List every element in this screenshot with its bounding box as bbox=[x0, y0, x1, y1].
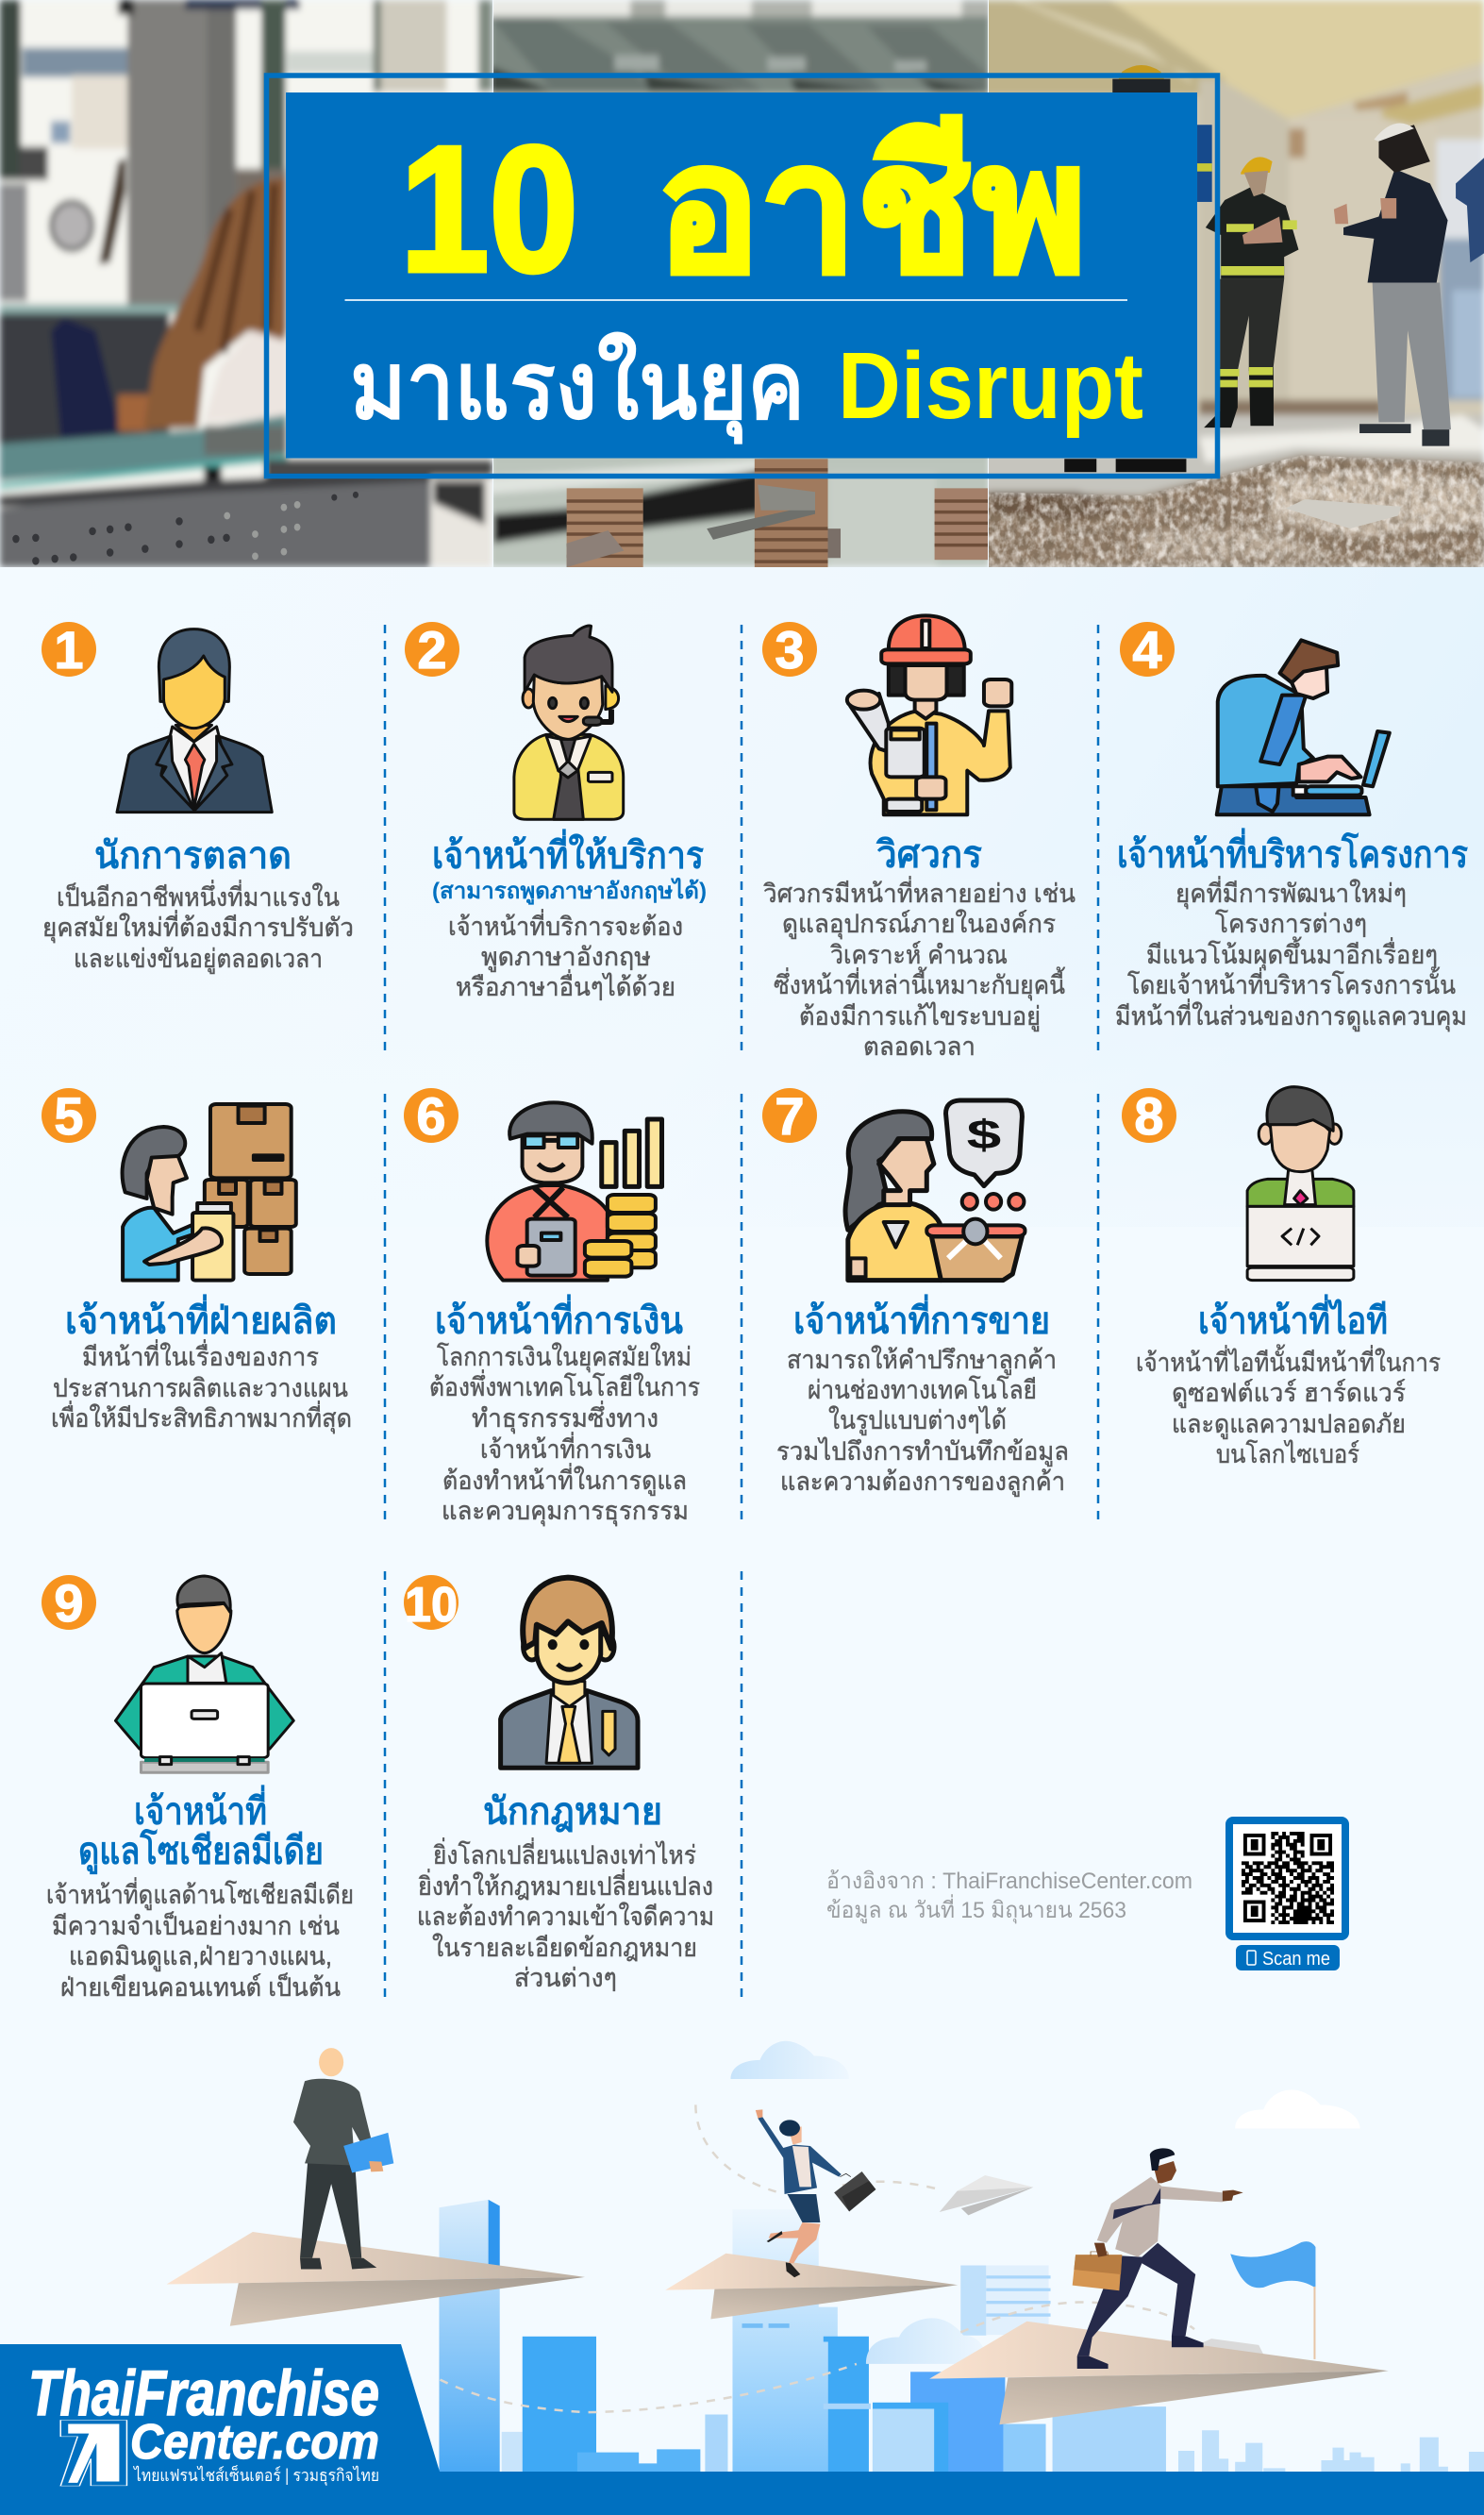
description: ยุคสมัยใหม่ที่ต้องมีการปรับตัว bbox=[42, 910, 354, 944]
description: เพื่อให้มีประสิทธิภาพมากที่สุด bbox=[51, 1400, 352, 1434]
header photo: industrial machinery bbox=[493, 0, 988, 567]
QR code bbox=[1229, 1820, 1345, 1937]
description: และดูแลความปลอดภัย bbox=[1172, 1410, 1406, 1439]
header photo: damaged building inspection bbox=[989, 0, 1484, 567]
description: ดูซอฟต์แวร์ ฮาร์ดแวร์ bbox=[1172, 1378, 1406, 1408]
description: ทำธุรกรรมซึ่งทาง bbox=[472, 1400, 659, 1434]
heading: นักกฎหมาย bbox=[483, 1791, 662, 1833]
description: ตลอดเวลา bbox=[863, 1032, 975, 1061]
footer illustration: dashed flight paths bbox=[440, 2104, 1194, 2412]
title background bbox=[286, 92, 1197, 459]
description: วิศวกรมีหน้าที่หลายอย่าง เช่น bbox=[763, 876, 1075, 908]
icon: sales officer: $ bbox=[967, 1112, 1001, 1158]
number badge 3: 3 bbox=[775, 620, 805, 679]
description: และต้องทำความเข้าใจดีความ bbox=[417, 1902, 714, 1931]
number badge 8: 8 bbox=[1134, 1086, 1164, 1146]
figure: businessman walking bbox=[1073, 2148, 1243, 2369]
description: และควบคุมการธุรกรรม bbox=[442, 1497, 689, 1527]
icon: service officer bbox=[514, 626, 624, 819]
number badge 1: 1 bbox=[54, 620, 84, 679]
description: โครงการต่างๆ bbox=[1215, 910, 1367, 938]
description bbox=[46, 1877, 354, 2002]
heading bbox=[78, 1785, 324, 1874]
description bbox=[51, 1339, 352, 1434]
panel: 2 service officer bbox=[405, 620, 707, 1001]
number badge 4: 4 bbox=[1132, 620, 1162, 679]
icon: sales officer bbox=[845, 1100, 1025, 1281]
logo: ThaiFranchise Center.com: Center.com bbox=[130, 2415, 379, 2470]
panel: 4 project manager bbox=[1115, 620, 1468, 1032]
figure: businesswoman jumping bbox=[756, 2109, 875, 2277]
number badge 4 bbox=[1120, 620, 1175, 679]
description bbox=[42, 880, 354, 974]
logo: ThaiFranchise Center.com bbox=[0, 2344, 440, 2515]
icon: production officer bbox=[123, 1104, 296, 1281]
source credit bbox=[826, 1869, 1192, 1924]
subtitle: มาแรงในยุค bbox=[350, 331, 805, 444]
number badge 6: 6 bbox=[416, 1086, 446, 1146]
panel: 6 finance officer bbox=[404, 1086, 700, 1527]
icon: social media officer bbox=[115, 1576, 293, 1772]
number badge 7 bbox=[762, 1086, 817, 1146]
description: ต้องทำหน้าที่ในการดูแล bbox=[442, 1463, 687, 1496]
number badge 5 bbox=[42, 1086, 96, 1146]
description: โดยเจ้าหน้าที่บริหารโครงการนั้น bbox=[1127, 966, 1456, 999]
description: และแข่งขันอยู่ตลอดเวลา bbox=[74, 945, 323, 974]
subtitle bbox=[350, 331, 1143, 444]
description: เจ้าหน้าที่ดูแลด้านโซเชียลมีเดีย bbox=[46, 1877, 354, 1910]
number badge 9 bbox=[42, 1573, 96, 1633]
description: ยิ่งโลกเปลี่ยนแปลงเท่าไหร่ bbox=[433, 1837, 696, 1869]
number badge 3 bbox=[762, 620, 817, 679]
logo: ThaiFranchise Center.com: ไทยแฟรนไชส์เซ็นเตอร์ | รวมธุรกิจไทย bbox=[132, 2464, 379, 2486]
heading: เจ้าหน้าที่ไอที bbox=[1198, 1294, 1388, 1342]
heading: เจ้าหน้าที่การเงิน bbox=[435, 1294, 683, 1342]
description: ส่วนต่างๆ bbox=[514, 1964, 617, 1992]
number badge 2: 2 bbox=[417, 620, 447, 679]
description: และความต้องการของลูกค้า bbox=[780, 1467, 1065, 1497]
number badge 8 bbox=[1122, 1086, 1176, 1146]
icon: flag bbox=[1230, 2241, 1315, 2359]
description: เจ้าหน้าที่การเงิน bbox=[480, 1432, 651, 1464]
description: หรือภาษาอื่นๆได้ด้วย bbox=[456, 969, 675, 1001]
panel: 10 lawyer bbox=[404, 1575, 714, 1992]
description: มีแนวโน้มผุดขึ้นมาอีกเรื่อยๆ bbox=[1146, 936, 1438, 971]
description bbox=[1115, 876, 1467, 1032]
description: เป็นอีกอาชีพหนึ่งที่มาแรงใน bbox=[57, 880, 340, 912]
description: ในรูปแบบต่างๆได้ bbox=[828, 1405, 1007, 1435]
source credit: อ้างอิงจาก : ThaiFranchiseCenter.com bbox=[826, 1869, 1192, 1894]
description: รวมไปถึงการทำบันทึกข้อมูล bbox=[776, 1437, 1069, 1467]
description: วิเคราะห์ คำนวณ bbox=[830, 940, 1008, 969]
heading: ดูแลโซเชียลมีเดีย bbox=[78, 1829, 324, 1874]
small paper plane bbox=[940, 2175, 1033, 2215]
heading: วิศวกร bbox=[875, 834, 982, 876]
footer illustration: skyline bbox=[439, 2200, 1484, 2473]
scan me button bbox=[1236, 1945, 1340, 1970]
subtitle: Disrupt bbox=[838, 333, 1143, 439]
number badge 2 bbox=[405, 620, 459, 679]
description: เจ้าหน้าที่บริการจะต้อง bbox=[448, 909, 683, 941]
description: ฝ่ายเขียนคอนเทนต์ เป็นต้น bbox=[60, 1970, 341, 2002]
description: แอดมินดูแล,ฝ่ายวางแผน, bbox=[69, 1942, 332, 1971]
icon: logo arrow bbox=[60, 2421, 126, 2486]
description: ยุคที่มีการพัฒนาใหม่ๆ bbox=[1176, 876, 1407, 910]
description bbox=[448, 909, 683, 1001]
description: สามารถให้คำปรึกษาลูกค้า bbox=[787, 1345, 1057, 1375]
panel: 7 sales officer bbox=[762, 1086, 1069, 1497]
description: ประสานการผลิตและวางแผน bbox=[53, 1374, 348, 1402]
paper plane 3 bbox=[929, 2322, 1389, 2424]
panel: 1 marketer bbox=[42, 620, 354, 974]
main title: 10 bbox=[400, 109, 578, 310]
sub heading: (สามารถพูดภาษาอังกฤษได้) bbox=[432, 877, 707, 905]
panel: 5 production officer bbox=[42, 1086, 352, 1434]
paper plane 2 bbox=[665, 2254, 958, 2319]
description bbox=[429, 1342, 700, 1527]
description: บนโลกไซเบอร์ bbox=[1216, 1439, 1359, 1468]
scan me button: Scan me bbox=[1262, 1949, 1330, 1970]
heading: เจ้าหน้าที่ให้บริการ bbox=[432, 829, 704, 877]
icon: lawyer bbox=[501, 1578, 638, 1768]
source credit: ข้อมูล ณ วันที่ 15 มิถุนายน 2563 bbox=[826, 1894, 1126, 1924]
icon: engineer bbox=[847, 615, 1011, 814]
description: ผ่านช่องทางเทคโนโลยี bbox=[808, 1376, 1037, 1404]
description: มีความจำเป็นอย่างมาก เช่น bbox=[52, 1909, 340, 1940]
number badge 6 bbox=[404, 1086, 459, 1146]
number badge 1 bbox=[42, 620, 96, 679]
heading: เจ้าหน้าที่การขาย bbox=[793, 1294, 1050, 1342]
description: มีหน้าที่ในเรื่องของการ bbox=[82, 1339, 319, 1371]
title frame bbox=[266, 75, 1217, 476]
icon: project manager bbox=[1217, 640, 1390, 814]
description: ซึ่งหน้าที่เหล่านี้เหมาะกับยุคนี้ bbox=[774, 966, 1065, 1001]
description: ในรายละเอียดข้อกฎหมาย bbox=[432, 1933, 697, 1962]
paper plane 1 bbox=[167, 2232, 585, 2326]
description: ยิ่งทำให้กฎหมายเปลี่ยนแปลง bbox=[418, 1869, 713, 1901]
description: มีหน้าที่ในส่วนของการดูแลควบคุม bbox=[1115, 998, 1467, 1032]
icon: finance officer bbox=[487, 1102, 662, 1281]
number badge 5: 5 bbox=[54, 1086, 84, 1146]
description: ดูแลอุปกรณ์ภายในองค์กร bbox=[782, 909, 1056, 940]
main title bbox=[400, 109, 1087, 310]
description bbox=[763, 876, 1075, 1061]
header photo: office reception bbox=[0, 0, 492, 567]
panel: 8 IT officer bbox=[1122, 1086, 1441, 1468]
bottom band bbox=[0, 2472, 1484, 2515]
description: ต้องมีการแก้ไขระบบอยู่ bbox=[799, 1002, 1041, 1031]
number badge 10: 10 bbox=[405, 1578, 458, 1633]
number badge 9: 9 bbox=[54, 1573, 84, 1633]
heading: เจ้าหน้าที่ bbox=[134, 1785, 267, 1833]
description: เจ้าหน้าที่ไอทีนั้นมีหน้าที่ในการ bbox=[1136, 1344, 1441, 1377]
heading: นักการตลาด bbox=[94, 835, 292, 877]
main title: อาชีพ bbox=[657, 109, 1087, 310]
description bbox=[776, 1345, 1069, 1497]
description bbox=[417, 1837, 714, 1992]
footer illustration: clouds bbox=[730, 2041, 1360, 2364]
description bbox=[1136, 1344, 1441, 1468]
logo: ThaiFranchise Center.com: ThaiFranchise bbox=[28, 2357, 379, 2429]
figure: man with folder bbox=[293, 2048, 393, 2269]
description: พูดภาษาอังกฤษ bbox=[481, 943, 651, 972]
description: โลกการเงินในยุคสมัยใหม่ bbox=[437, 1342, 692, 1373]
icon: IT officer bbox=[1247, 1087, 1354, 1281]
heading: เจ้าหน้าที่ฝ่ายผลิต bbox=[65, 1294, 337, 1342]
icon: marketer bbox=[117, 629, 272, 813]
panel: 3 engineer bbox=[762, 615, 1075, 1061]
number badge 7: 7 bbox=[775, 1086, 805, 1146]
title panel bbox=[266, 75, 1217, 476]
panel: 9 social media officer bbox=[42, 1573, 354, 2002]
description: ต้องพึ่งพาเทคโนโลยีในการ bbox=[429, 1369, 700, 1401]
